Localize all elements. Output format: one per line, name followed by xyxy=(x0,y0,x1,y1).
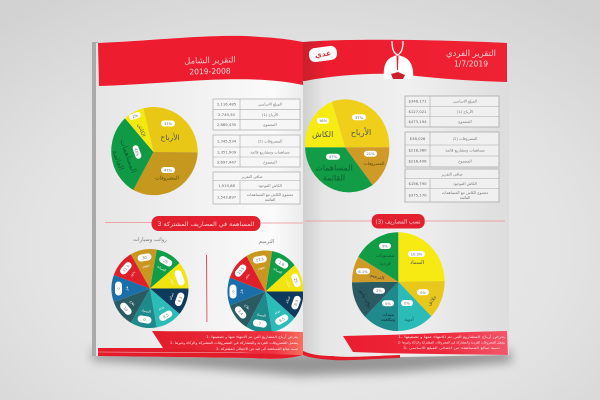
table: left net report xyxy=(213,172,300,204)
user name tag xyxy=(308,45,338,63)
pie chart: expense ratios: 0% xyxy=(404,302,410,306)
pie chart: individual report: 21% xyxy=(366,152,375,156)
left page sheet xyxy=(96,37,303,359)
right page sheet xyxy=(303,40,509,359)
book shadow xyxy=(92,350,512,376)
table: left totals 1: 2,889,435 xyxy=(217,122,237,127)
left footer notes: 1- يعرض أرباح المشاريع التي تم الانتهاء منها و تصفيتها xyxy=(206,334,298,339)
pie chart: overall report: 2% xyxy=(132,113,139,119)
wheel chart: salaries and cars: تجهيز xyxy=(141,263,150,269)
table: left net report: 1,919,88 xyxy=(218,183,236,188)
table: right totals 2: المجموع xyxy=(458,158,472,164)
table: left totals 1: المجموع xyxy=(263,122,277,127)
pie chart: expense ratios: 6.1% xyxy=(358,270,368,274)
wheel heading: رواتب وسيارات xyxy=(133,237,167,243)
left footer stripes xyxy=(98,348,303,359)
wheel chart: renovation: 23.5 xyxy=(237,267,245,275)
wheel chart: salaries and cars: بذور xyxy=(128,270,136,278)
pie chart: expense ratios: السماد xyxy=(410,260,424,266)
wheel chart: renovation: 1.8 xyxy=(278,261,286,267)
table: right totals 1: المجموع xyxy=(458,119,472,124)
wheel heading: الترميم xyxy=(259,239,274,245)
wheel chart: salaries and cars: 0 xyxy=(117,287,121,290)
pie chart: overall report: الكاش xyxy=(136,123,146,138)
table: right net report: صافي التقرير xyxy=(440,172,463,176)
table: left totals 1: الأرباح (1) xyxy=(262,112,278,117)
table: left totals 2: المصروفات (2) xyxy=(258,138,282,144)
wheel chart: renovation: 0 xyxy=(232,290,236,293)
right heading xyxy=(446,48,496,68)
pie chart: overall report: الأرباح xyxy=(160,132,180,142)
wheel chart: renovation: عمالة xyxy=(285,295,291,304)
table: right totals 2: $216,406 xyxy=(408,158,427,164)
pie chart: expense ratios: مستويات xyxy=(376,253,395,259)
table: right totals 2: المصروفات (2) xyxy=(453,136,477,141)
wheel chart: salaries and cars xyxy=(111,249,188,328)
pie chart: individual report: 47% xyxy=(329,155,338,159)
pie chart: expense ratios: مبيدات xyxy=(382,312,394,317)
table: left net report: 1,543,897 xyxy=(217,194,237,200)
wheel chart: renovation: 8.5 xyxy=(279,317,285,323)
pie chart: expense ratios: 10.3% xyxy=(411,252,423,256)
pie chart: expense ratios: فردية xyxy=(379,261,391,267)
wheel chart: renovation: 7 xyxy=(258,322,261,326)
table: right totals 2: مساهمات ومشاريع قائمة xyxy=(445,148,485,152)
left footer notes xyxy=(152,331,303,355)
right footer notes: 1- يعرض أرباح المشاريع التي تم الانتهاء منها و تصفيتها xyxy=(398,334,505,339)
panel: left page xyxy=(92,36,304,359)
wheel chart: renovation: تجهيز xyxy=(256,265,265,271)
pie chart: expense ratios: علائق xyxy=(426,294,438,307)
wheel chart: renovation: 3.4 xyxy=(237,309,244,317)
pie chart: individual report: الأرباح xyxy=(351,127,371,137)
table: left totals 1 xyxy=(213,99,300,130)
section banner: shared expenses: المساهمة في المصاريف المشتركة 3 xyxy=(158,221,255,228)
wheel chart: salaries and cars: 0 xyxy=(143,318,147,322)
pie chart: individual report: المساهمات xyxy=(315,164,353,172)
pie chart: individual report: 37% xyxy=(355,116,364,120)
pie chart: individual report: القائمة xyxy=(323,174,345,182)
wheel chart: salaries and cars: 11.5 xyxy=(122,264,130,273)
table: left totals 1: 2,116,485 xyxy=(217,102,237,106)
wheel chart: renovation: بذور xyxy=(243,272,251,280)
left page spine edge xyxy=(92,42,98,356)
pie chart: overall report: القائمة xyxy=(111,149,126,172)
pie chart: expense ratios: أدوية xyxy=(404,316,414,323)
pie chart: expense ratios xyxy=(352,232,445,331)
pie chart: overall report: 43% xyxy=(133,148,140,157)
wheel chart: salaries and cars: 9.5 xyxy=(163,313,169,319)
table: right totals 2 xyxy=(405,132,499,167)
table: right net report: القائمة xyxy=(460,195,470,200)
table: right totals 2: $218,380 xyxy=(408,148,427,152)
section banner: shared expenses xyxy=(105,216,303,231)
section banner: expense ratios xyxy=(305,214,505,228)
pie chart: overall report: 37% xyxy=(164,122,173,126)
right heading: التقرير الفردي xyxy=(446,48,496,58)
table: left net report: الكاش الموجود xyxy=(258,183,282,188)
wheel chart: renovation: السماد xyxy=(256,312,266,318)
left heading: التقرير الشامل xyxy=(184,54,236,66)
pie chart: individual report: المصروفات xyxy=(363,162,385,167)
pie chart: expense ratios: 0% xyxy=(385,302,391,306)
wheel chart: renovation: غذاء xyxy=(274,309,281,316)
right footer notes: 2- يشمل المصروفات الفردية والمشاركة في المصروفات المشتركة والزكاة وغيرها xyxy=(398,340,505,344)
wheel chart: salaries and cars: أعلاف xyxy=(168,276,176,285)
table: left totals 2: 1,351,909 xyxy=(217,150,237,154)
icon: businessman xyxy=(384,41,413,79)
wheel chart: salaries and cars: غذاء xyxy=(158,305,165,312)
pie chart: expense ratios: 9% xyxy=(382,244,388,248)
divider between wheels xyxy=(206,255,207,322)
table: left net report: القائمة xyxy=(265,197,275,202)
table: right totals 2: $38,026 xyxy=(410,136,426,141)
table: left totals 2: المجموع xyxy=(263,160,277,164)
pie chart: overall report: 47% xyxy=(164,168,173,172)
wheel chart: renovation: 27.5 xyxy=(256,257,264,263)
left footer notes: 3- نسبة مبالغ المساهمة الى قيد من الاجمالي المشتركة xyxy=(216,347,298,351)
table: left totals 1: المبلغ الاساسي xyxy=(258,102,282,106)
wheel chart: salaries and cars: السماد xyxy=(141,308,151,314)
wheel chart: renovation: علاج xyxy=(244,303,251,311)
wheel chart: renovation: الصيانة xyxy=(272,267,283,275)
table: right net report: مجموع الكاش مع المساهمات xyxy=(442,190,488,195)
user name tag: عدي xyxy=(314,48,332,60)
pie chart: expense ratios: ومكافحة xyxy=(381,317,395,322)
pie chart: individual report xyxy=(305,99,389,192)
left heading xyxy=(184,54,236,77)
table: left totals 2: مساهمات ومشاريع قائمة xyxy=(250,150,290,154)
table: right net report: $156,790 xyxy=(408,181,427,186)
right footer notes xyxy=(343,331,508,355)
right footer stripe xyxy=(303,351,400,360)
pie chart: expense ratios: 2% xyxy=(376,289,382,293)
pie chart: individual report: 16% xyxy=(319,119,328,123)
right footer notes: 3- نسبة مبالغ المساهمة من اجمالي المبلغ الاساسي xyxy=(403,346,500,350)
wheel chart: salaries and cars: 10 xyxy=(122,306,129,313)
left header band xyxy=(98,36,303,86)
wheel chart: renovation: أعلاف xyxy=(285,278,292,288)
panel: right page xyxy=(303,40,509,360)
table: right totals 1: $473,194 xyxy=(408,119,427,124)
table: right totals 1: $346,171 xyxy=(408,98,427,104)
wheel chart: renovation: 8.3 xyxy=(294,299,299,306)
table: right net report: $375,170 xyxy=(408,192,427,198)
wheel chart: salaries and cars: 25 xyxy=(163,259,168,265)
pie chart: overall report: المساهمات xyxy=(118,138,139,174)
table: left totals 2: 2,697,447 xyxy=(217,160,237,164)
table: right net report xyxy=(405,169,499,202)
pie chart: overall report xyxy=(111,107,198,195)
wheel chart: salaries and cars: الصيانة xyxy=(156,264,167,273)
pie chart: expense ratios: رواتب وأجور xyxy=(358,287,373,309)
table: right totals 1: الأرباح (1) xyxy=(457,109,473,114)
table: left net report: مجموع الكاش مع المساهمات xyxy=(247,192,293,197)
table: right totals 1 xyxy=(405,96,499,127)
right heading: 1/7/2019 xyxy=(454,60,488,68)
right header band xyxy=(303,40,507,82)
table: left totals 1: 2,749,50 xyxy=(218,112,236,117)
table: right totals 1: $127,021 xyxy=(408,109,427,114)
wheel chart: renovation: نقل xyxy=(240,289,244,294)
table: left totals 2: 1,345,534 xyxy=(217,138,237,144)
wheel chart: salaries and cars: 30 xyxy=(142,255,148,260)
table: right net report: الكاش الموجود xyxy=(453,181,477,186)
wheel chart: renovation: 25 xyxy=(293,278,298,283)
pie chart: individual report: الكاش xyxy=(312,130,333,139)
left heading: 2019-2008 xyxy=(189,66,231,77)
left footer notes: 2- يشمل المصروفات الفردية والمشاركة في المصروفات المشتركة والزكاة وغيرها xyxy=(170,341,298,345)
wheel chart: salaries and cars: نقل xyxy=(125,286,129,291)
table: left net report: صافي التقرير xyxy=(240,174,263,179)
pie chart: expense ratios: الترميم xyxy=(369,272,385,282)
wheel chart: salaries and cars: 8.3 xyxy=(177,296,183,303)
wheel chart: salaries and cars: عمالة xyxy=(168,292,175,301)
pie chart: overall report: المصروفات xyxy=(155,176,179,182)
table: left totals 2 xyxy=(213,135,300,167)
section banner: expense ratios: نسب المصاريف (3) xyxy=(376,220,421,226)
pie chart: expense ratios: 0% xyxy=(420,291,426,295)
wheel chart: salaries and cars: علاج xyxy=(129,300,136,307)
table: right totals 1: المبلغ الاساسي xyxy=(453,98,477,104)
wheel chart: renovation xyxy=(228,250,304,333)
